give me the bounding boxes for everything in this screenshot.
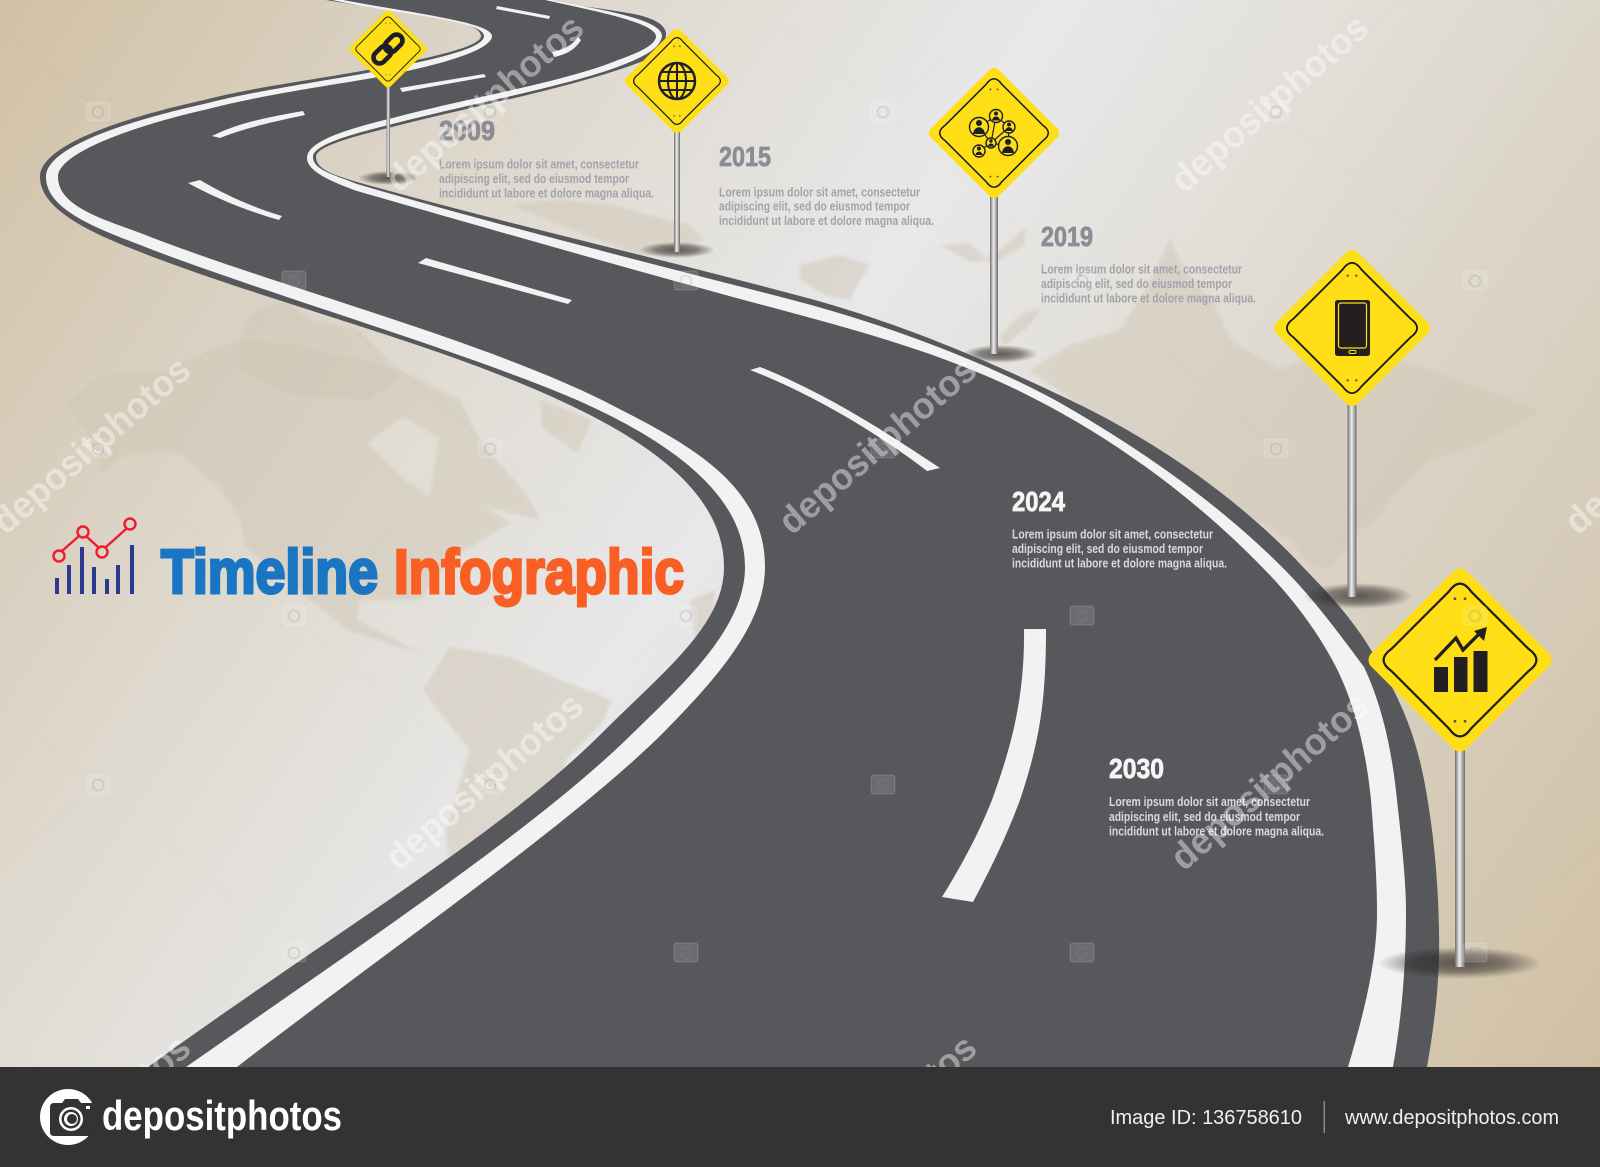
watermarks: depositphotos bbox=[377, 684, 591, 878]
timeline entry 2019: 2019 bbox=[1041, 221, 1093, 252]
road shadows below asphalt bbox=[358, 171, 1038, 363]
icon: people network bbox=[970, 110, 1018, 157]
right edge line bbox=[307, 0, 1406, 1067]
timeline entry 2009: adipiscing elit, sed do eiusmod tempor bbox=[439, 172, 629, 186]
watermarks: depositphotos bbox=[377, 6, 591, 200]
footer logo icon bbox=[40, 1089, 96, 1145]
footer bar bbox=[0, 1067, 1600, 1167]
road sign 2: globe bbox=[630, 34, 724, 252]
timeline entry 2019: incididunt ut labore et dolore magna aliqua. bbox=[1041, 292, 1256, 306]
watermarks: depositphotos bbox=[1162, 6, 1376, 200]
road bbox=[40, 0, 1439, 1067]
world map bbox=[66, 200, 1540, 866]
title text bbox=[161, 538, 684, 607]
road sign 1: chain link bbox=[353, 14, 423, 177]
icon: growth chart bbox=[1434, 627, 1488, 692]
footer divider bbox=[1324, 1101, 1325, 1133]
asphalt bbox=[40, 0, 1439, 1067]
website: www.depositphotos.com bbox=[1344, 1106, 1559, 1129]
post shadows over road bbox=[1303, 583, 1542, 979]
timeline entry 2009 bbox=[439, 115, 654, 200]
icon: rising line and bars bbox=[54, 518, 136, 594]
timeline entry 2024: Lorem ipsum dolor sit amet, consectetur bbox=[1012, 528, 1213, 542]
watermark camera marks bbox=[86, 102, 1487, 962]
timeline entry 2015: incididunt ut labore et dolore magna aliqua. bbox=[719, 214, 934, 228]
footer logo wordmark: depositphotos bbox=[102, 1092, 342, 1139]
left edge line bbox=[46, 0, 765, 1067]
timeline entry 2030: incididunt ut labore et dolore magna aliqua. bbox=[1109, 824, 1324, 838]
timeline entry 2024: incididunt ut labore et dolore magna aliqua. bbox=[1012, 556, 1227, 570]
timeline entry 2015: Lorem ipsum dolor sit amet, consectetur bbox=[719, 186, 920, 200]
road sign 5: growth chart bbox=[1378, 578, 1542, 967]
timeline entry 2030: Lorem ipsum dolor sit amet, consectetur bbox=[1109, 795, 1310, 809]
title block bbox=[54, 518, 684, 607]
timeline entry 2024 bbox=[1012, 486, 1227, 570]
watermarks: depositphotos bbox=[1162, 684, 1376, 878]
icon: smartphone bbox=[1335, 300, 1370, 356]
timeline entry 2015: adipiscing elit, sed do eiusmod tempor bbox=[719, 200, 910, 214]
lane dashes bbox=[188, 6, 1046, 902]
image id: Image ID: 136758610 bbox=[1110, 1106, 1302, 1129]
timeline entry 2030: adipiscing elit, sed do eiusmod tempor bbox=[1109, 810, 1300, 824]
icon: chain link bbox=[371, 32, 405, 66]
timeline entry 2009: 2009 bbox=[439, 115, 495, 146]
watermarks: depositphotos bbox=[770, 348, 984, 542]
road sign 4: smartphone bbox=[1282, 258, 1422, 597]
title text: Infographic bbox=[394, 538, 684, 607]
timeline entry 2009: Lorem ipsum dolor sit amet, consectetur bbox=[439, 158, 639, 172]
timeline entry 2030 bbox=[1109, 753, 1324, 838]
timeline entry 2019: Lorem ipsum dolor sit amet, consectetur bbox=[1041, 262, 1242, 276]
title text: Timeline bbox=[161, 538, 378, 607]
timeline entry 2030: 2030 bbox=[1109, 753, 1164, 784]
timeline entry 2024: adipiscing elit, sed do eiusmod tempor bbox=[1012, 542, 1203, 556]
timeline entry 2024: 2024 bbox=[1012, 486, 1065, 517]
icon: globe bbox=[659, 63, 695, 99]
timeline entry 2019: adipiscing elit, sed do eiusmod tempor bbox=[1041, 277, 1232, 291]
timeline entry 2009: incididunt ut labore et dolore magna aliqua. bbox=[439, 186, 654, 200]
timeline entry 2015 bbox=[719, 141, 934, 228]
timeline entry 2015: 2015 bbox=[719, 141, 771, 172]
road sign 3: people network bbox=[936, 74, 1052, 354]
timeline entry 2019 bbox=[1041, 221, 1256, 306]
